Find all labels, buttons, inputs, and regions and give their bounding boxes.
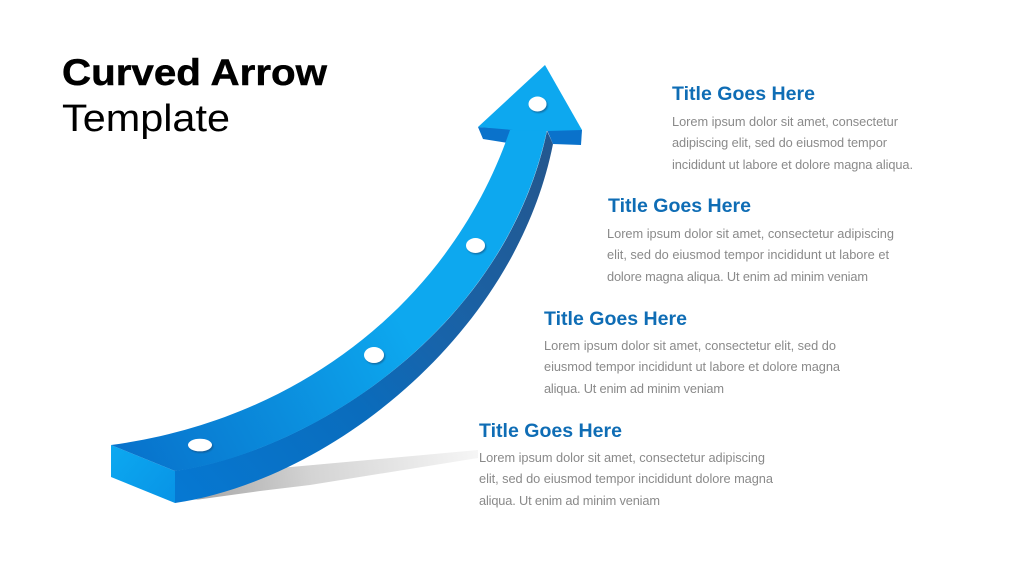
text block 1: Title Goes Here [672, 83, 815, 105]
text block 4 [479, 420, 774, 508]
text block 3: Title Goes Here [544, 308, 687, 330]
arrow shaft side face [174, 131, 553, 503]
marker dot 2 [364, 347, 384, 363]
text block 2: dolore magna aliqua. Ut enim ad minim veniam [607, 269, 868, 284]
title [62, 52, 327, 140]
text block 1: adipiscing elit, sed do eiusmod tempor [672, 135, 888, 150]
text block 4: elit, sed do eiusmod tempor incididunt dolore magna [479, 471, 774, 486]
text block 1 [672, 83, 913, 172]
text block 3: aliqua. Ut enim ad minim veniam [544, 381, 724, 396]
curved arrow [111, 65, 582, 503]
text block 3 [544, 308, 841, 396]
text block 3: Lorem ipsum dolor sit amet, consectetur elit, sed do [544, 338, 836, 353]
arrow head right underside [547, 130, 582, 145]
text block 1: incididunt ut labore et dolore magna aliqua. [672, 157, 913, 172]
text block 2: Title Goes Here [608, 195, 751, 217]
title: Template [62, 98, 230, 140]
text block 2: elit, sed do eiusmod tempor incididunt ut labore et [607, 247, 889, 262]
arrow end face [111, 445, 175, 503]
marker dot 1 [188, 439, 212, 451]
arrow head top face [478, 65, 582, 131]
text block 2: Lorem ipsum dolor sit amet, consectetur adipiscing [607, 226, 894, 241]
text block 4: Lorem ipsum dolor sit amet, consectetur adipiscing [479, 450, 765, 465]
text block 1: Lorem ipsum dolor sit amet, consectetur [672, 114, 899, 129]
text block 4: Title Goes Here [479, 420, 622, 442]
text block 3: eiusmod tempor incididunt ut labore et dolore magna [544, 359, 841, 374]
title: Curved Arrow [62, 52, 327, 93]
marker dot 3 [466, 238, 485, 253]
text block 2 [607, 195, 894, 284]
marker dot 4 [528, 96, 546, 112]
arrow shaft top face [111, 130, 547, 471]
arrow head left underside [478, 127, 514, 143]
arrow ground shadow [195, 450, 478, 500]
text block 4: aliqua. Ut enim ad minim veniam [479, 493, 660, 508]
